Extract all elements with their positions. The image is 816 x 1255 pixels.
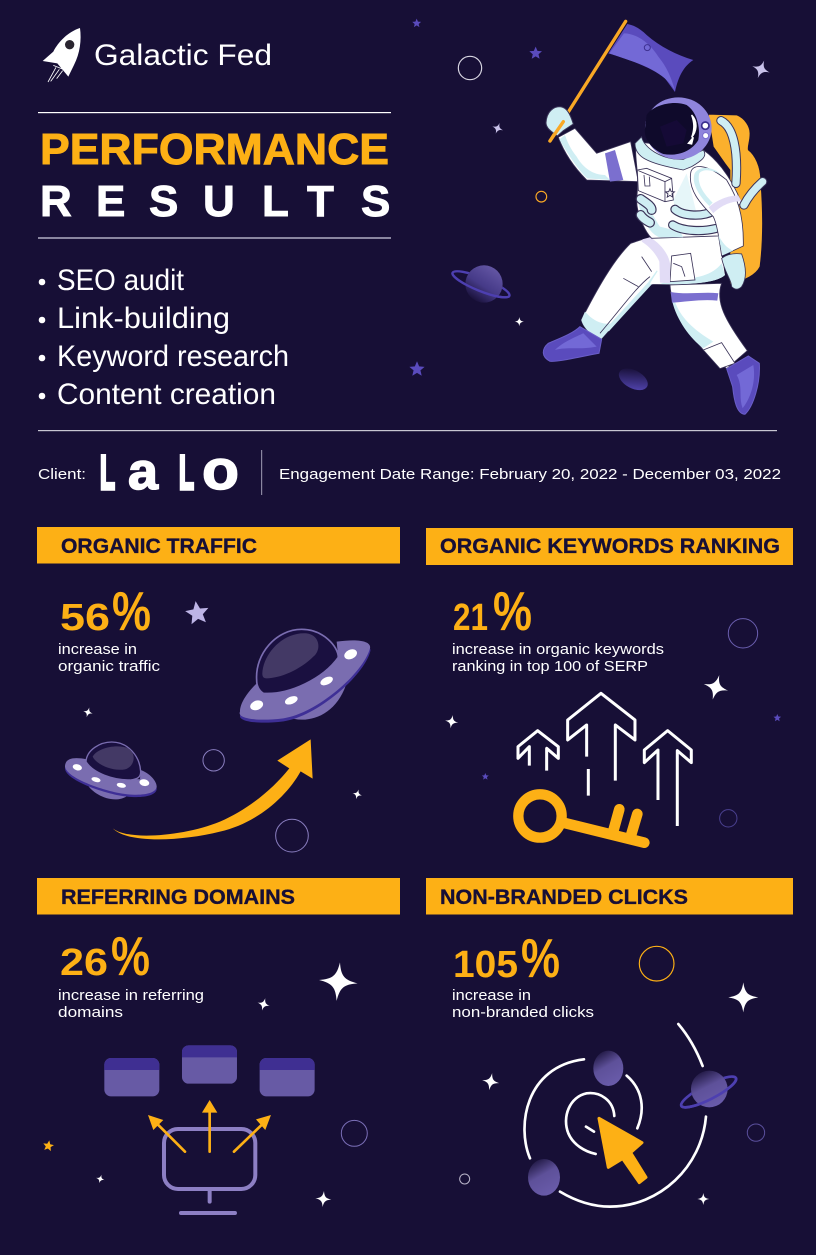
heading: non-branded clicks xyxy=(426,878,793,914)
services list xyxy=(39,264,289,411)
services list: SEO audit xyxy=(57,264,185,297)
chest box xyxy=(637,168,673,202)
logo wordmark: Galactic Fed xyxy=(94,39,272,72)
right leg xyxy=(670,283,747,369)
stat: 26% xyxy=(58,925,204,1021)
helmet xyxy=(645,97,712,159)
stat: 26%: domains xyxy=(58,1004,123,1021)
stat: 105%: % xyxy=(521,927,560,989)
icon: large UFO xyxy=(240,629,370,723)
arrows: outward links xyxy=(148,1100,271,1152)
icon: cursor xyxy=(599,1118,646,1183)
client row xyxy=(38,438,781,501)
logo: Galactic Fed xyxy=(43,28,272,82)
hips xyxy=(650,235,725,284)
icon: site cards xyxy=(104,1045,315,1096)
stat: 56%: organic traffic xyxy=(58,658,161,675)
arrow: growth xyxy=(113,739,313,839)
heading: organic traffic xyxy=(37,527,400,564)
stat: 21%: % xyxy=(493,580,532,642)
stat: 21%: increase in organic keywords xyxy=(452,641,664,658)
stat: 56% xyxy=(58,580,161,675)
stat: 26%: 26 xyxy=(60,942,108,984)
stat: 105%: 105 xyxy=(453,944,518,986)
stat: 26%: % xyxy=(111,925,150,987)
services list: Keyword research xyxy=(57,340,289,373)
heading: organic keywords ranking: ORGANIC KEYWORDS RANKING xyxy=(440,535,780,558)
stat: 56%: increase in xyxy=(58,641,137,658)
title: PERFORMANCE xyxy=(40,125,389,174)
panel: organic keywords ranking xyxy=(426,528,793,843)
collar xyxy=(635,137,705,170)
backpack xyxy=(708,114,763,284)
boots xyxy=(543,327,602,361)
left leg xyxy=(581,239,668,339)
panel: non-branded clicks xyxy=(426,878,793,1207)
illustration: orbit target and cursor xyxy=(460,946,765,1207)
illustration: UFOs, arrow and stars xyxy=(65,599,370,852)
heading: non-branded clicks: NON-BRANDED CLICKS xyxy=(440,886,688,909)
hero illustration: astronaut with flag xyxy=(543,21,763,414)
stat: 21% xyxy=(452,580,664,675)
stat: 21%: 21 xyxy=(453,597,488,639)
flag xyxy=(608,24,693,92)
illustration: monitor linking to sites xyxy=(42,961,367,1213)
services list: Content creation xyxy=(57,378,276,411)
illustration: key and up arrows xyxy=(444,619,781,843)
panel: organic traffic xyxy=(37,527,400,852)
heading: organic traffic: ORGANIC TRAFFIC xyxy=(61,535,257,558)
stat: 105%: non-branded clicks xyxy=(452,1004,594,1021)
right arm xyxy=(690,166,743,256)
raised arm xyxy=(558,128,638,182)
stat: 26%: increase in referring xyxy=(58,987,204,1004)
icon: monitor xyxy=(164,1129,255,1213)
client row: Engagement Date Range: February 20, 2022 - December 03, 2022 xyxy=(279,466,781,483)
services list: Link-building xyxy=(57,302,230,335)
client logo: a xyxy=(128,443,159,501)
background decor: stars, rings and planet xyxy=(409,19,773,395)
heading: referring domains xyxy=(37,878,400,914)
chest straps xyxy=(673,209,715,231)
flag pole xyxy=(550,21,626,141)
stat: 21%: ranking in top 100 of SERP xyxy=(452,658,648,675)
icon: orbit rings xyxy=(524,1024,706,1207)
heading: referring domains: REFERRING DOMAINS xyxy=(61,886,295,909)
heading: organic keywords ranking xyxy=(426,528,793,565)
icon: key xyxy=(518,794,644,843)
torso xyxy=(636,142,742,238)
icon: small UFO xyxy=(65,742,157,799)
title xyxy=(40,125,390,226)
client logo: o xyxy=(202,438,239,501)
title: RESULTS xyxy=(40,177,390,226)
stat: 105%: increase in xyxy=(452,987,531,1004)
icon: up arrows xyxy=(518,693,691,826)
glove xyxy=(546,107,573,136)
icon: rocket xyxy=(43,28,81,82)
icon: planets xyxy=(528,1051,739,1196)
stat: 56%: % xyxy=(112,580,151,642)
client logo: L xyxy=(100,447,115,500)
air tubes xyxy=(721,121,763,205)
stat: 105% xyxy=(452,927,594,1021)
stat: 56%: 56 xyxy=(60,597,110,639)
panel: referring domains xyxy=(37,878,400,1213)
client logo: L xyxy=(179,447,194,500)
client row: Client: xyxy=(38,466,86,483)
